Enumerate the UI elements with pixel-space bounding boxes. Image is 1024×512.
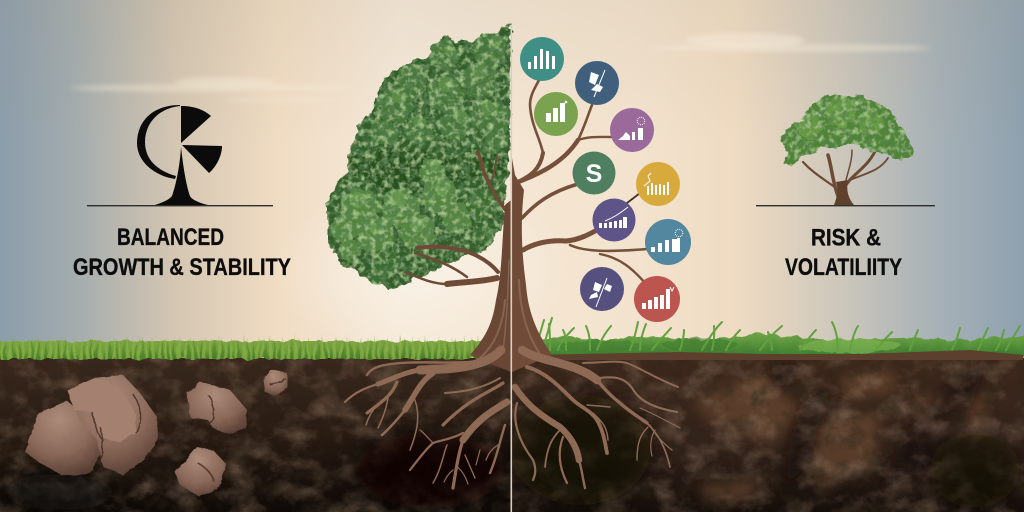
icon: indigo flags — [580, 267, 624, 311]
center divider line — [510, 25, 512, 512]
heading: risk and volatility: VOLATILIITY — [785, 254, 902, 281]
trunk bark highlights — [480, 260, 540, 358]
heading: risk and volatility — [785, 224, 902, 281]
logo: crescent arc — [137, 105, 180, 179]
trunk right half — [512, 158, 552, 372]
small tree right — [780, 94, 912, 205]
icon: red bars — [634, 276, 680, 322]
rock: small top — [263, 369, 287, 397]
icon: S badge: S — [586, 160, 602, 188]
logo: upper wedge — [181, 106, 211, 143]
small tree crown — [780, 94, 912, 167]
main tree foliage — [327, 25, 510, 290]
heading: risk and volatility: RISK & — [811, 224, 881, 252]
icon: navy flags — [575, 61, 619, 105]
grass right — [530, 318, 1024, 356]
sky background — [0, 0, 1024, 360]
icon: yellow chart — [636, 162, 680, 206]
trunk left half — [470, 200, 511, 372]
roots left — [345, 350, 507, 488]
soil left — [0, 358, 511, 512]
heading: balanced growth and stability: BALANCED — [117, 224, 224, 251]
logo: lower wedge — [182, 145, 222, 173]
rock: left large — [25, 401, 100, 475]
rock: large back — [67, 375, 158, 475]
icon: S badge — [572, 152, 616, 194]
right tree branches — [518, 80, 647, 284]
rock: lower — [175, 447, 227, 497]
heading: balanced growth and stability — [73, 224, 291, 281]
icon: purple chart — [610, 108, 654, 152]
logo: stem — [155, 147, 208, 205]
small tree branches — [803, 145, 888, 196]
topsoil strip right — [530, 350, 1023, 360]
icon: blue bars — [645, 219, 691, 265]
roots right — [515, 350, 680, 488]
left logo — [137, 105, 222, 205]
small tree trunk — [834, 180, 854, 205]
rock: large front — [67, 378, 136, 443]
icon: indigo trend — [592, 198, 636, 242]
clouds left — [70, 77, 350, 103]
clouds right — [650, 33, 930, 52]
soil right — [510, 358, 1024, 512]
left tree branches — [405, 152, 507, 284]
rock: middle — [187, 382, 247, 435]
rock creases — [92, 378, 285, 482]
rocks — [25, 369, 287, 497]
icon: green bars — [534, 92, 578, 136]
icon: teal bars — [520, 37, 564, 81]
heading: balanced growth and stability: GROWTH & STABILITY — [73, 254, 291, 281]
right divider — [756, 205, 935, 206]
grass left — [0, 333, 505, 359]
left divider — [87, 205, 273, 206]
grass right: tall blades — [536, 318, 1020, 350]
